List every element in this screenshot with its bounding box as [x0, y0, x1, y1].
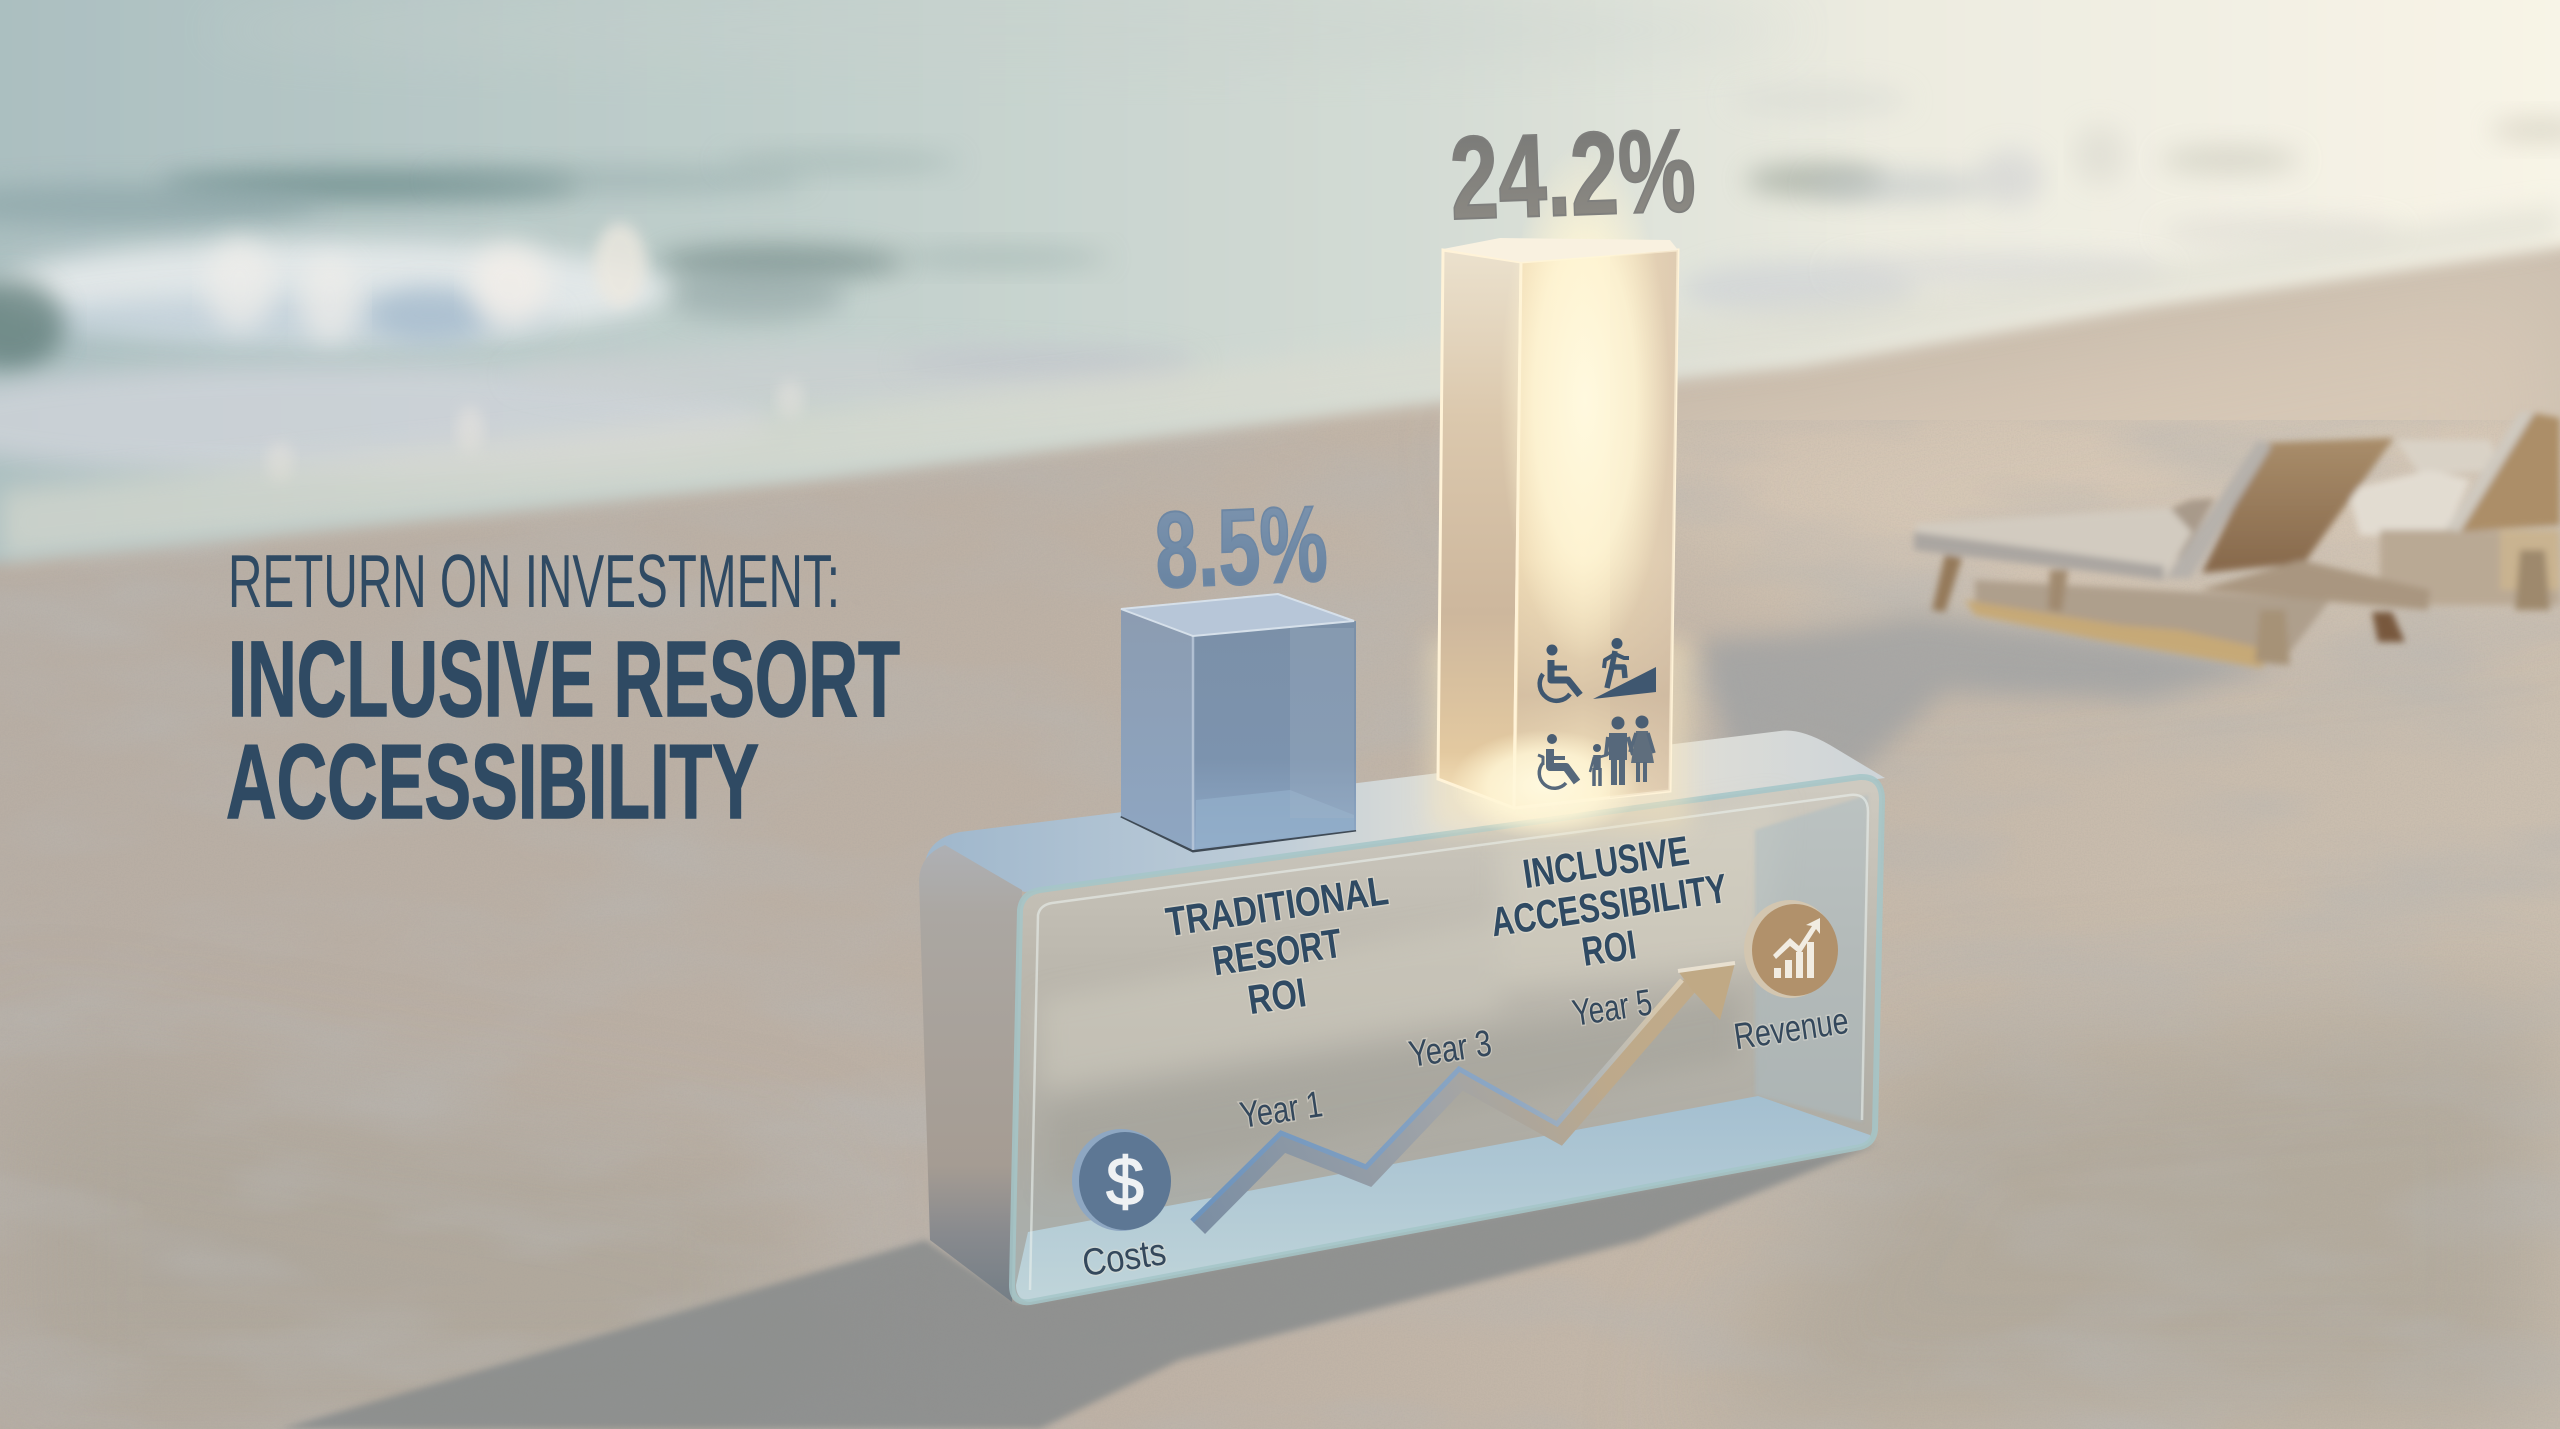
bar front edge highlight: [1192, 636, 1194, 850]
bar front face: [1193, 621, 1356, 850]
bar left face: [1121, 609, 1193, 850]
plinth top surface: [925, 731, 1885, 892]
label line: INCLUSIVE: [1520, 827, 1692, 897]
bar label: inclusive accessibility ROI: [1488, 827, 1730, 975]
title line: inclusive resort: INCLUSIVE RESORT: [228, 618, 900, 739]
coin rim: [1072, 1129, 1170, 1231]
wet sand edge: [0, 205, 2560, 560]
lower foam: [0, 365, 770, 475]
bar: traditional resort 8.5%: [1121, 594, 1356, 851]
revenue coin: [1744, 900, 1838, 998]
value: 24.2%: 24.2%: [1448, 105, 1697, 245]
bar inner floor: [1196, 790, 1354, 848]
bar right shade: [1610, 250, 1678, 798]
sea: [0, 0, 2560, 570]
bar: inclusive accessibility 24.2%: [1430, 140, 1690, 840]
label line: ROI: [1245, 969, 1309, 1023]
bar outer glow: [1430, 640, 1690, 830]
plinth inner rim: [1030, 795, 1868, 1290]
sun loungers: [1914, 412, 2560, 668]
year 5: Year 5: [1570, 982, 1655, 1034]
plinth glass rim: [1012, 777, 1882, 1302]
bar top face: [1121, 594, 1354, 636]
bar shadow line: [1121, 816, 1356, 851]
plinth front glass: [1012, 777, 1882, 1302]
revenue label: Revenue: [1731, 1000, 1851, 1057]
arrow head: [1678, 963, 1735, 1020]
coin rim: [1744, 900, 1836, 998]
plinth reflections: [1040, 800, 1780, 1190]
label line: ACCESSIBILITY: [1488, 865, 1730, 945]
plinth: [919, 731, 1885, 1302]
costs label: Costs: [1080, 1231, 1169, 1285]
arrow body: [1199, 985, 1690, 1228]
bar lower shade: [1516, 258, 1676, 805]
coin disc: [1079, 1132, 1171, 1230]
costs coin: [1072, 1129, 1171, 1231]
value: 8.5%: 8.5%: [1153, 482, 1330, 611]
bar top face: [1443, 238, 1678, 262]
arrow upper edge: [1192, 980, 1682, 1221]
bar left face: [1438, 250, 1521, 808]
bar inner sheen: [1290, 628, 1354, 818]
sand grain: [0, 420, 2560, 1429]
icon: wheelchair and family: [1538, 716, 1654, 788]
label line: TRADITIONAL: [1163, 867, 1391, 945]
dollar sign: $: [1106, 1144, 1144, 1220]
plinth left side: [919, 845, 1022, 1302]
label line: ROI: [1579, 921, 1639, 975]
rear lounger: [2348, 412, 2560, 610]
year 3: Year 3: [1406, 1022, 1494, 1075]
lounger shadow on sand: [1700, 613, 2285, 800]
foam crest: [0, 240, 670, 340]
right water marks: [1745, 164, 1885, 196]
waves: [0, 0, 2560, 482]
icon: person on ramp: [1593, 638, 1656, 699]
growth arrow: [1192, 963, 1735, 1228]
label line: RESORT: [1209, 920, 1345, 984]
title line: accessibility: ACCESSIBILITY: [226, 723, 759, 841]
coin disc: [1752, 904, 1838, 996]
sand ripples: [0, 420, 2560, 1429]
front lounger: [1914, 438, 2430, 668]
year 1: Year 1: [1237, 1083, 1325, 1136]
plinth water band: [1016, 1096, 1871, 1302]
bar label: traditional resort ROI: [1163, 867, 1391, 1023]
bar upper glow: [1500, 140, 1670, 660]
icon: wheelchair user: [1540, 644, 1580, 701]
plinth right inner glass: [1755, 795, 1868, 1122]
bar base glow: [1450, 730, 1640, 840]
icon: rising bars: [1773, 918, 1820, 978]
year labels: [1237, 982, 1655, 1136]
arrow head edge: [1678, 963, 1735, 971]
bar front face: [1514, 250, 1678, 808]
title line: return on investment: RETURN ON INVESTMENT:: [228, 539, 840, 623]
title block: [226, 539, 900, 841]
shadow cast by plinth: [281, 1143, 1880, 1429]
